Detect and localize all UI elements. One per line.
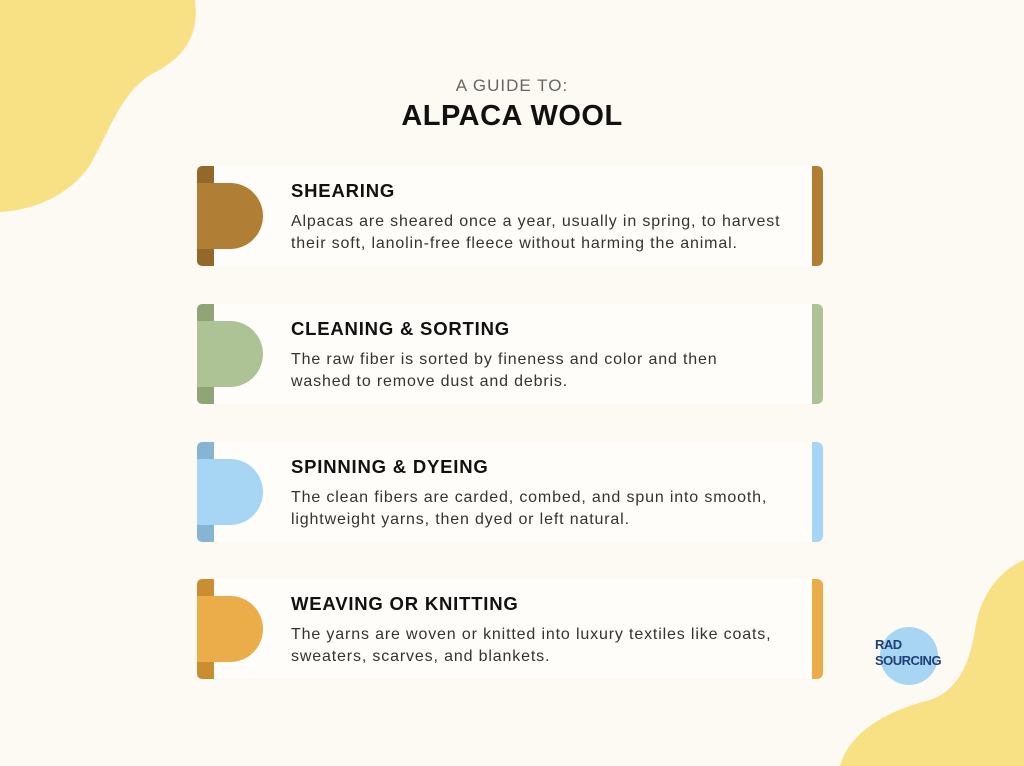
panel: shearing: Alpacas are sheared once a year, usually in spring, to harvest xyxy=(291,213,780,230)
panel: cleaning: The raw fiber is sorted by fineness and color and then xyxy=(291,351,718,368)
panel: spinning: SPINNING & DYEING xyxy=(291,456,489,477)
panel: spinning xyxy=(197,442,823,542)
panel: shearing xyxy=(197,166,823,266)
panel: shearing: SHEARING xyxy=(291,180,395,201)
decorative blob bottom-right xyxy=(840,560,1024,766)
panel: weaving: WEAVING OR KNITTING xyxy=(291,593,519,614)
logo: RAD xyxy=(875,637,902,652)
panel: shearing: their soft, lanolin-free fleece without harming the animal. xyxy=(291,235,738,252)
panel: spinning: lightweight yarns, then dyed or left natural. xyxy=(291,511,630,528)
panel: spinning: The clean fibers are carded, combed, and spun into smooth, xyxy=(291,489,767,506)
panel: weaving: The yarns are woven or knitted into luxury textiles like coats, xyxy=(291,626,771,643)
panel: cleaning xyxy=(197,304,823,404)
title: A GUIDE TO: xyxy=(456,76,568,95)
logo: SOURCING xyxy=(875,653,941,668)
title xyxy=(401,76,623,132)
panel: cleaning: CLEANING & SORTING xyxy=(291,318,510,339)
logo xyxy=(875,627,941,685)
title: ALPACA WOOL xyxy=(401,100,623,132)
decorative blob top-left xyxy=(0,0,196,212)
panel: weaving: sweaters, scarves, and blankets. xyxy=(291,648,550,665)
panel: cleaning: washed to remove dust and debris. xyxy=(291,373,568,390)
panel: weaving xyxy=(197,579,823,679)
